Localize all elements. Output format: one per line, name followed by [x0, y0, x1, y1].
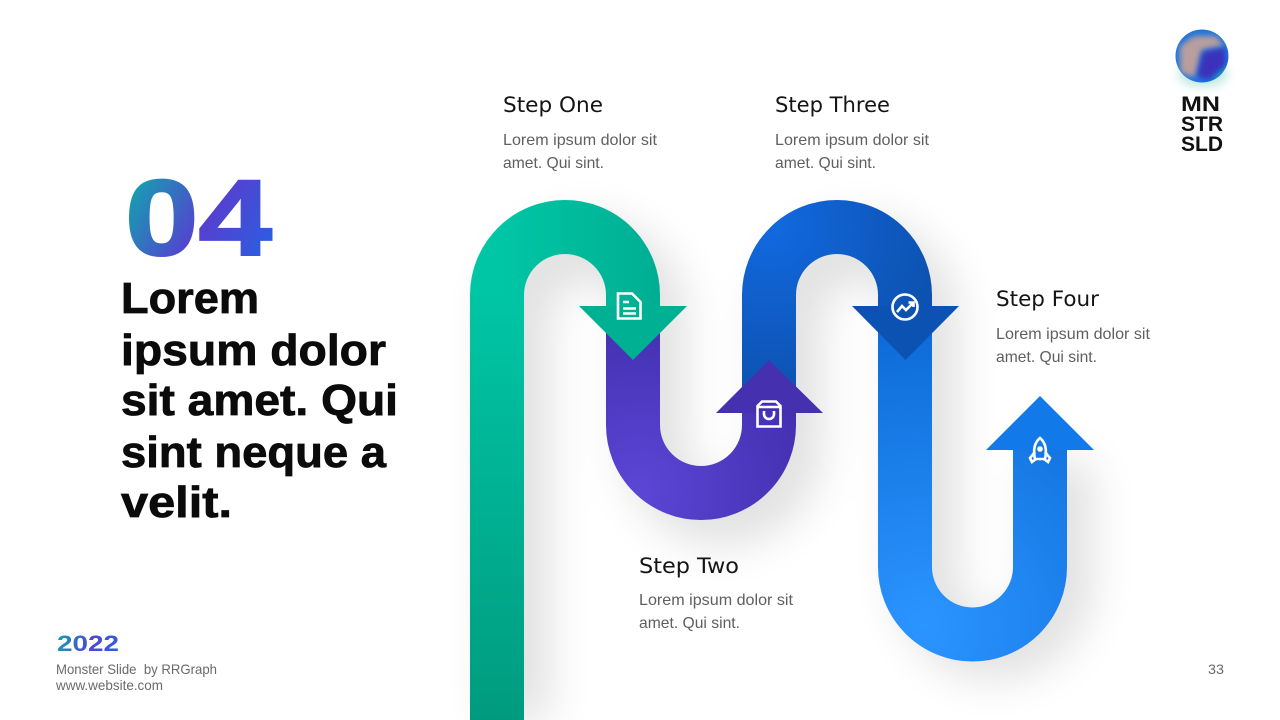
page number: 33 [1208, 661, 1224, 677]
text block: step four: amet. Qui sint. [996, 349, 1097, 366]
main heading: sit amet. Qui [121, 376, 398, 425]
text block: step four [996, 287, 1151, 366]
text block: step three [775, 93, 930, 172]
text block: step one: amet. Qui sint. [503, 155, 604, 172]
main heading: ipsum dolor [121, 326, 386, 375]
logo wordmark [1181, 93, 1223, 156]
text block: step one [503, 93, 658, 172]
logo sphere [1176, 30, 1230, 87]
main heading [121, 274, 398, 527]
logo [1176, 30, 1230, 156]
logo wordmark: MN [1181, 93, 1220, 116]
main heading: Lorem [121, 274, 259, 323]
text block: step four: Step Four [996, 287, 1099, 311]
ribbon shadow [519, 249, 1062, 720]
segment 1: green ribbon with down arrow [497, 227, 687, 720]
logo wordmark: SLD [1181, 133, 1223, 156]
footer: year and credits [55, 631, 217, 693]
text block: step two: Lorem ipsum dolor sit [639, 592, 794, 609]
icon: growth chart [892, 294, 918, 320]
segment 3: blue arch with down arrow [769, 227, 959, 400]
main heading: velit. [121, 478, 232, 527]
icon: shopping bag [758, 402, 780, 426]
icon: rocket [1030, 438, 1050, 462]
text block: step two: Step Two [639, 554, 739, 578]
footer: year and credits: www.website.com [55, 677, 163, 693]
text block: step three: amet. Qui sint. [775, 155, 876, 172]
main heading: sint neque a [121, 428, 387, 477]
logo wordmark: STR [1181, 113, 1223, 136]
footer: year and credits: 2022 [57, 631, 119, 656]
text block: step four: Lorem ipsum dolor sit [996, 326, 1151, 343]
segment 2: purple ribbon with up arrow [633, 325, 823, 493]
footer: year and credits: Monster Slide by RRGraph [56, 661, 217, 677]
text block: step one: Lorem ipsum dolor sit [503, 132, 658, 149]
big number 04: 04 [125, 157, 272, 278]
text block: step three: Step Three [775, 93, 890, 117]
icon: document [618, 294, 640, 318]
segment 4: lower blue ribbon with up arrow [905, 330, 1094, 634]
text block: step one: Step One [503, 93, 603, 117]
text block: step two: amet. Qui sint. [639, 615, 740, 632]
text block: step two [639, 554, 794, 632]
text block: step three: Lorem ipsum dolor sit [775, 132, 930, 149]
